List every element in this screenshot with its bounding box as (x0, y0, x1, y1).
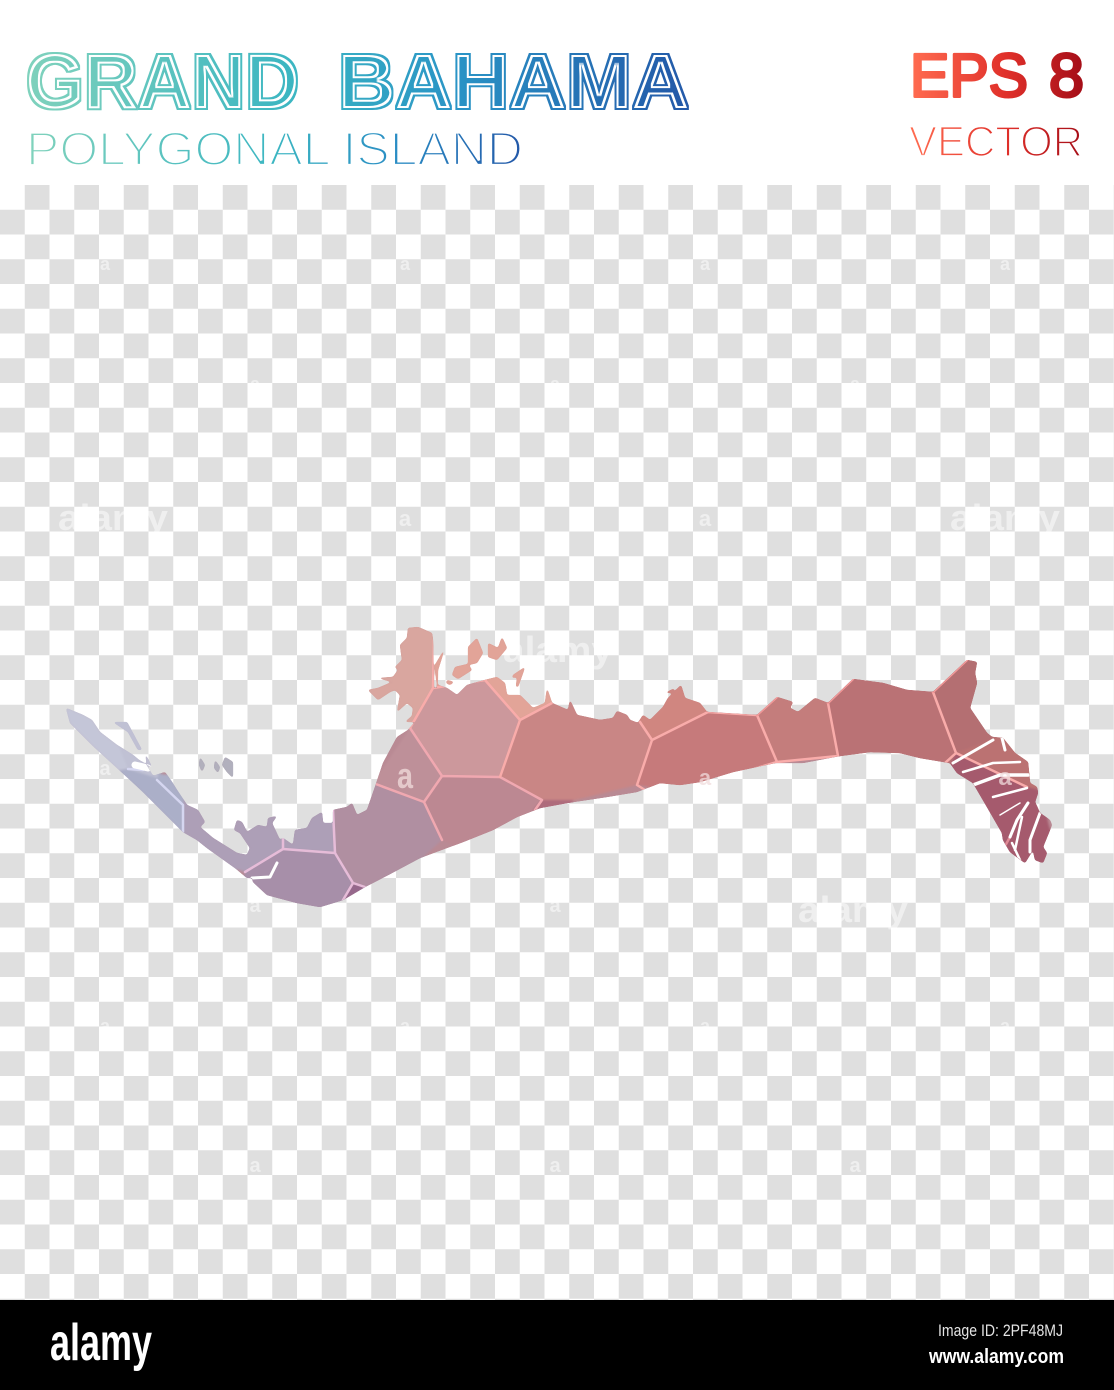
watermark marks: alamy (798, 889, 908, 930)
footer bar (0, 1300, 1114, 1390)
watermark marks: alamy (58, 497, 168, 538)
watermark marks: a (400, 254, 411, 274)
watermark marks: a (1000, 1016, 1011, 1036)
watermark marks: a (250, 374, 261, 394)
watermark marks: a (850, 374, 861, 394)
embedded watermark letters: a (998, 764, 1012, 791)
image id: Image ID: 2PF48MJ (938, 1321, 1063, 1340)
watermark marks: alamy (950, 497, 1060, 538)
watermark marks: a (249, 895, 261, 917)
title: Grand Bahama: BAHAMA (338, 39, 689, 125)
watermark marks: a (399, 506, 412, 531)
title: Grand Bahama (26, 39, 689, 125)
map: Grand Bahama polygonal island (66, 627, 1052, 907)
badge: EPS 8: EPS (910, 42, 1028, 110)
embedded watermark letters (397, 755, 1012, 796)
subtitle: polygonal island: POLYGONAL ISLAND (26, 122, 523, 175)
watermark marks: a (400, 1016, 411, 1036)
badge: EPS 8: 8 (1049, 42, 1084, 110)
watermark marks: a (700, 1016, 711, 1036)
embedded watermark letters: a (699, 765, 712, 790)
watermark marks: a (100, 1016, 111, 1036)
watermark marks: a (1000, 254, 1011, 274)
logo: alamy: alamy (50, 1314, 152, 1372)
watermark marks: a (700, 254, 711, 274)
voronoi cell edges and tidal channels (128, 640, 1040, 900)
watermark marks: alamy (503, 629, 613, 670)
watermark marks: a (849, 1155, 861, 1177)
website: www.alamy.com (928, 1346, 1064, 1368)
embedded watermark letters: a (397, 755, 414, 796)
watermark marks: a (99, 758, 111, 780)
watermark marks: a (699, 506, 712, 531)
watermark marks: a (549, 895, 561, 917)
watermark marks: a (550, 374, 561, 394)
title: Grand Bahama: GRAND (26, 39, 299, 125)
watermark marks (58, 254, 1060, 1177)
island cell fills (66, 627, 1052, 907)
watermark marks: a (249, 1155, 261, 1177)
watermark marks: a (100, 254, 111, 274)
badge: vector: VECTOR (909, 118, 1083, 166)
watermark marks: a (549, 1155, 561, 1177)
